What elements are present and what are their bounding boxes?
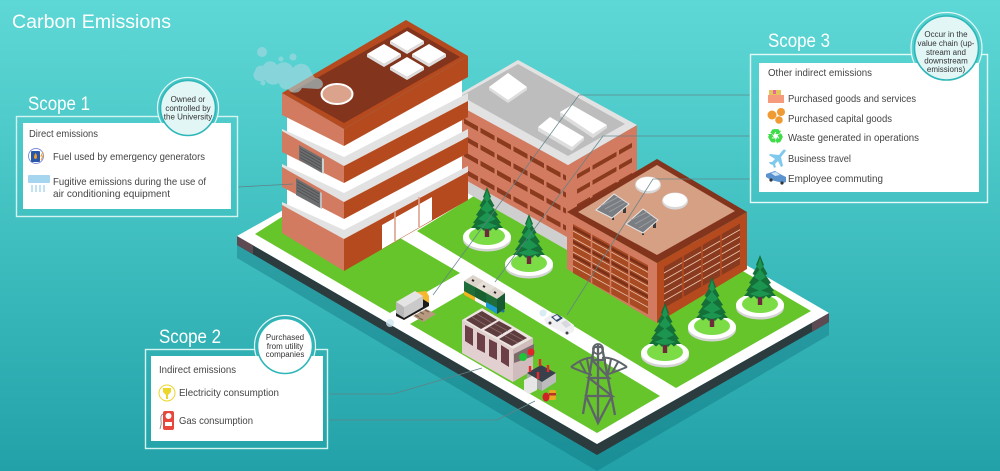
gas plant building	[462, 308, 534, 382]
skylight long 2	[538, 117, 584, 151]
icon: plane	[769, 150, 786, 168]
AC unit upper	[299, 145, 324, 174]
scope 3 badge text: value chain (up-	[918, 39, 975, 48]
text: fugitive emissions	[53, 176, 206, 200]
scope 1 heading: Scope 1	[28, 94, 90, 115]
panel: scope 2	[146, 316, 328, 448]
lawn: left	[255, 180, 460, 313]
leader lines scope 3	[433, 95, 750, 315]
text: electricity: Electricity consumption	[179, 387, 279, 399]
building 1: main brick tower	[282, 20, 468, 271]
scope 3 badge text	[918, 30, 975, 74]
text: goods: Purchased goods and services	[788, 93, 916, 105]
window grid left face	[573, 224, 648, 314]
solar panels	[596, 194, 658, 235]
skylight	[489, 73, 527, 103]
smoke	[253, 47, 323, 93]
icon: coins	[768, 108, 785, 124]
icon: fuel	[28, 148, 44, 164]
scope 3 badge text: downstream	[924, 56, 968, 66]
icon: goods	[768, 90, 784, 103]
scope 3 badge text: Occur in the	[924, 30, 968, 39]
scope 1 badge text: controlled by	[165, 104, 211, 113]
recycling bins	[464, 275, 505, 314]
scope 2 heading: Scope 2	[159, 327, 221, 348]
text: fugitive emissions: air conditioning equipment	[53, 188, 170, 200]
delivery truck	[386, 291, 436, 327]
scope 3 heading: Scope 3	[768, 31, 830, 52]
scope 3 badge text: emissions)	[927, 65, 965, 74]
icon: gas pump	[160, 411, 174, 430]
transformer	[524, 359, 556, 402]
lawn: right	[417, 180, 811, 388]
window grid right face	[664, 224, 740, 308]
scope 1 badge text: Owned or	[171, 95, 206, 104]
scope 2 badge text: from utility	[267, 342, 303, 351]
title: Carbon Emissions	[12, 12, 171, 33]
text: capital goods: Purchased capital goods	[788, 113, 892, 125]
door	[382, 197, 432, 249]
building 3: low brick block	[567, 159, 747, 323]
text: fugitive emissions: Fugitive emissions during the use of	[53, 176, 206, 188]
roof vent	[322, 84, 352, 104]
text: travel: Business travel	[788, 153, 851, 165]
car	[540, 310, 574, 335]
scope 1 badge text	[164, 95, 212, 122]
icon: plug	[159, 385, 175, 401]
roof circles	[635, 176, 688, 210]
tree 4	[688, 277, 736, 342]
text: commuting: Employee commuting	[788, 173, 883, 185]
icon: recycle: ♻	[767, 126, 784, 148]
text: waste: Waste generated in operations	[788, 132, 919, 144]
scope 2 badge text	[266, 333, 304, 359]
roof skylights	[367, 31, 446, 80]
skylight long	[560, 105, 607, 138]
scope 2 badge text: Purchased	[266, 333, 304, 342]
scope 1 badge text: the University	[164, 112, 212, 122]
text: gas: Gas consumption	[179, 415, 253, 427]
leader line scope 1	[238, 184, 293, 187]
text: fuel: Fuel used by emergency generators	[53, 151, 205, 163]
icon: air conditioner	[28, 175, 50, 192]
scope 3 subtitle: Other indirect emissions	[768, 67, 872, 79]
scope 2 subtitle: Indirect emissions	[159, 364, 236, 376]
tree 2	[505, 214, 553, 278]
electricity pylon	[571, 344, 627, 423]
scope 3 badge text: stream and	[926, 48, 966, 57]
tree 3	[641, 303, 689, 368]
platform shadow	[237, 245, 829, 471]
scope 2 badge text: companies	[266, 350, 304, 359]
panel: scope 1	[16, 78, 238, 216]
tree 5	[736, 255, 784, 320]
panel: scope 3	[750, 12, 988, 202]
isometric campus platform	[237, 105, 829, 455]
scope 1 subtitle: Direct emissions	[29, 128, 98, 140]
AC unit lower	[296, 178, 322, 209]
icon: car	[766, 171, 786, 185]
building 2: grey roof office	[449, 60, 637, 255]
lawn: front	[410, 285, 660, 433]
leader lines scope 2	[329, 368, 535, 420]
tree 1	[463, 187, 511, 252]
